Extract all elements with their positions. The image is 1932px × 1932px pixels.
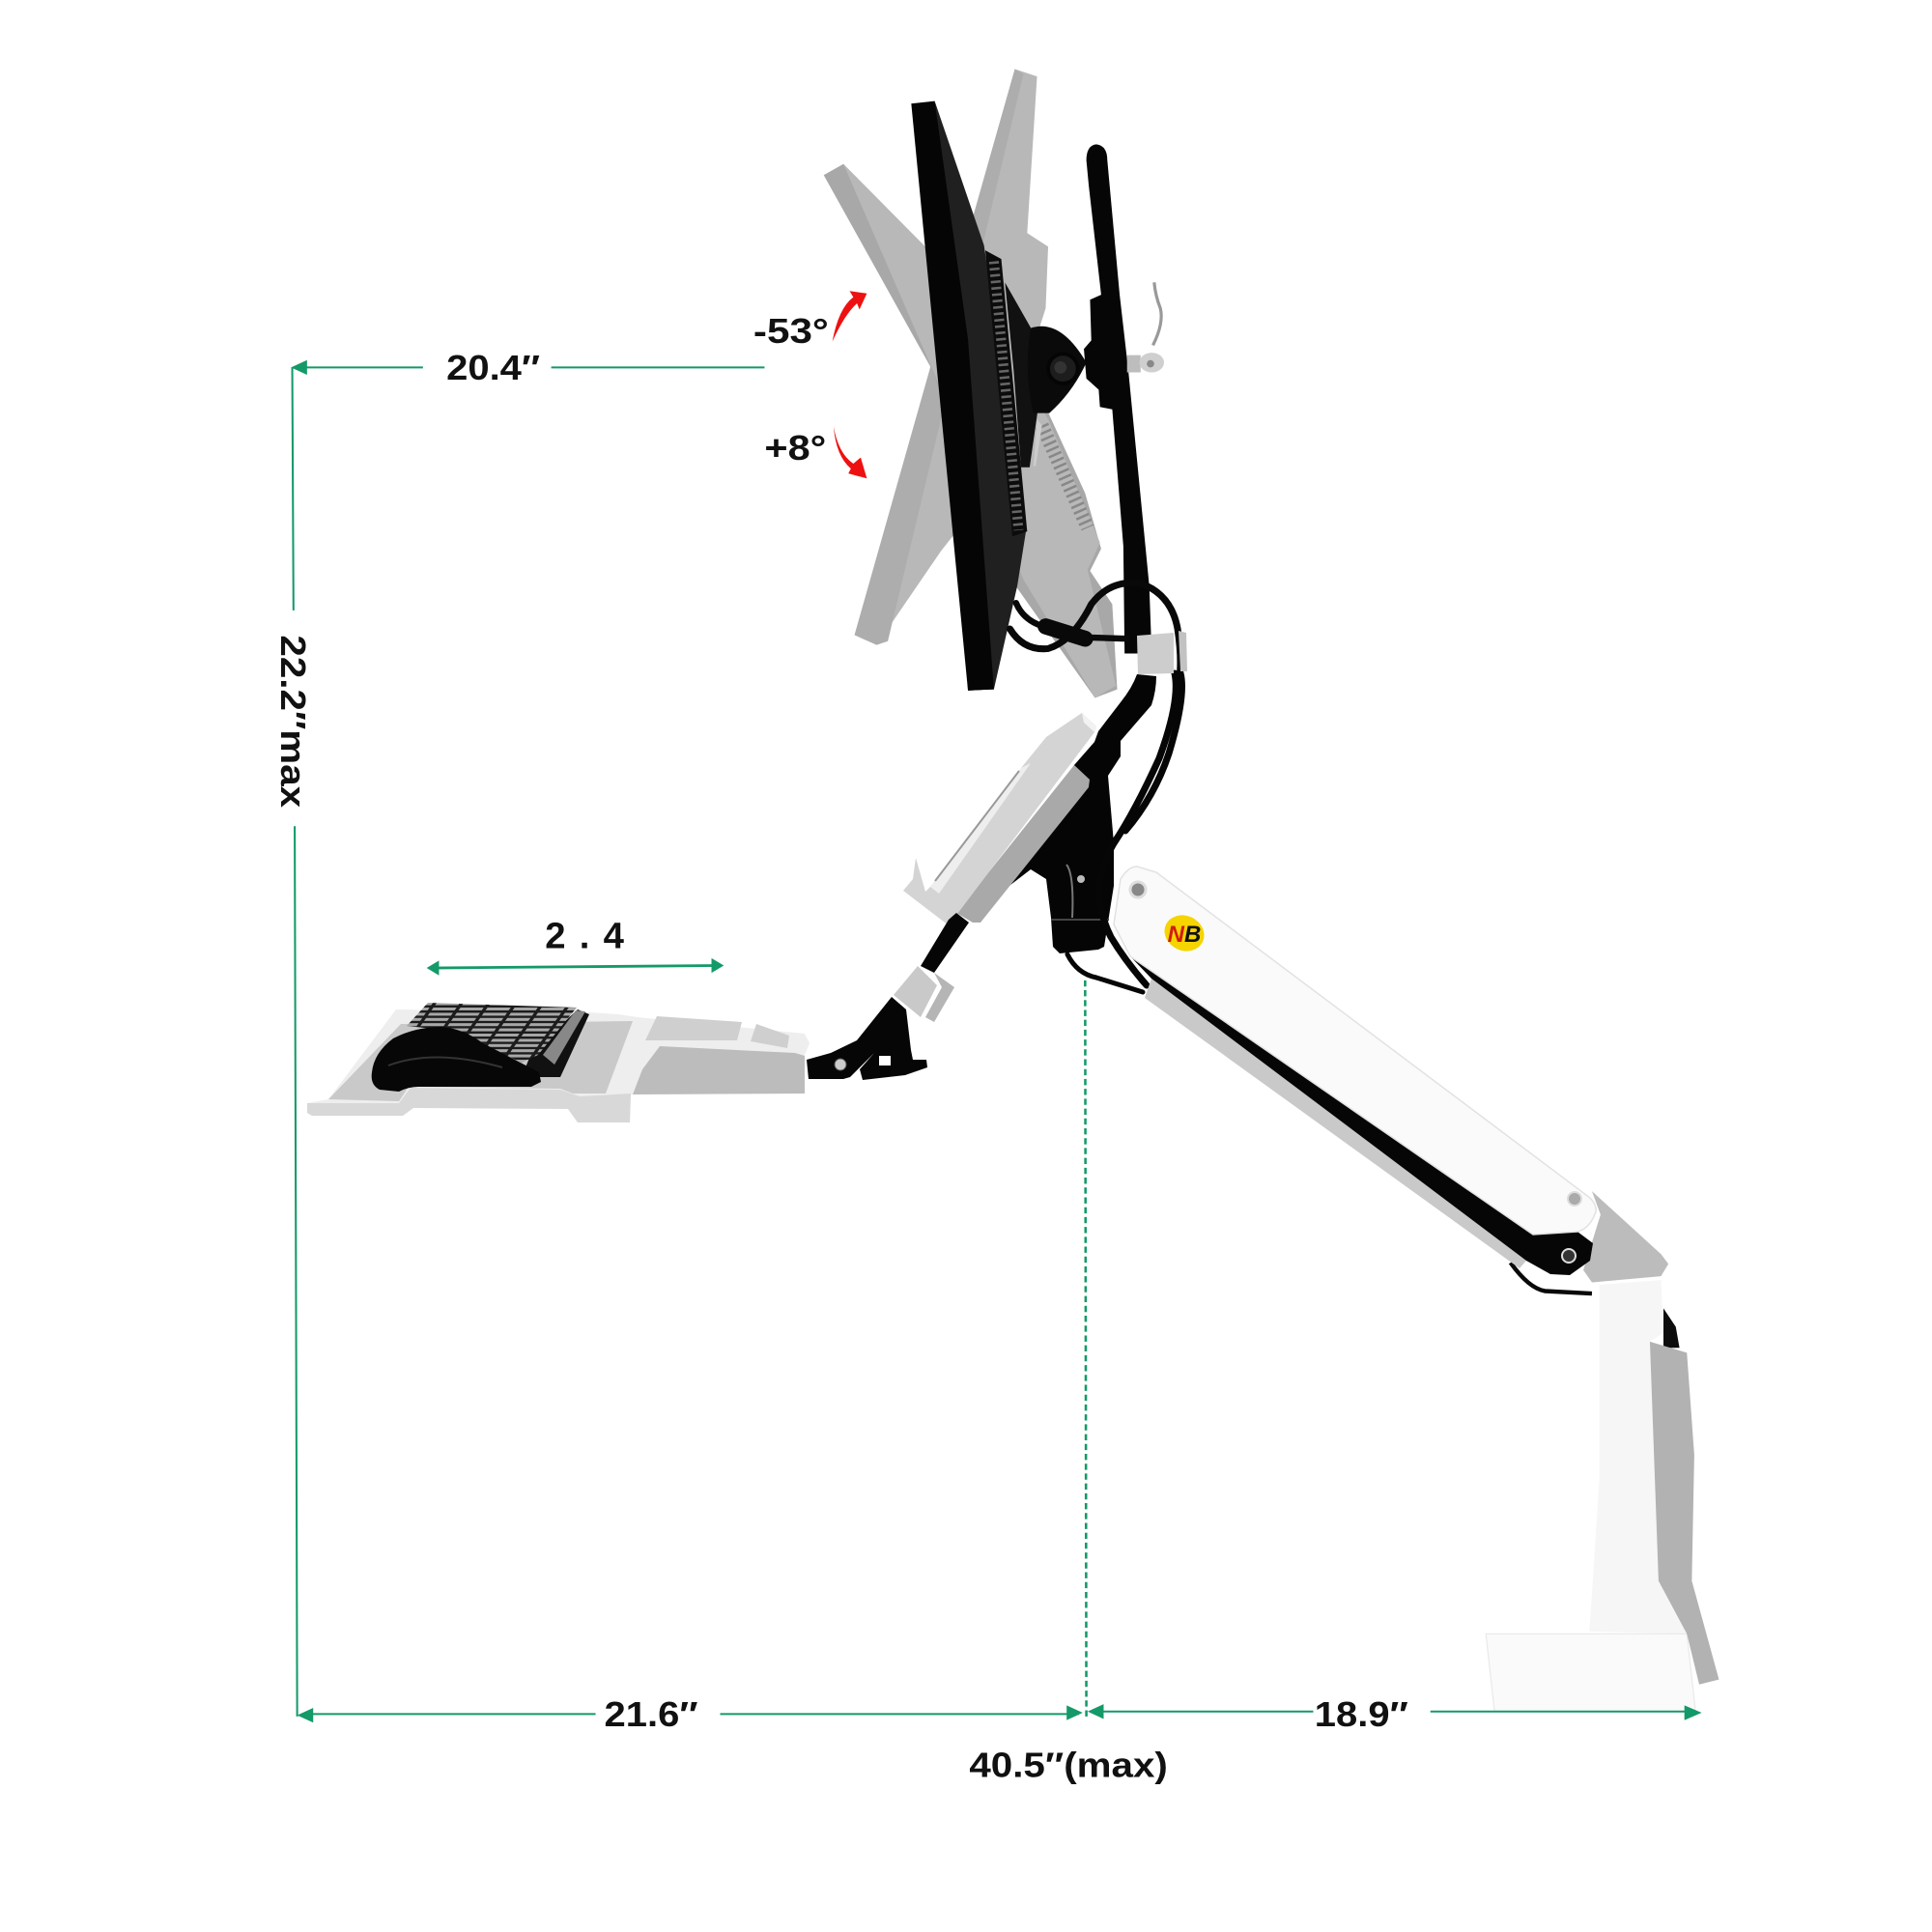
- key and chain: [1127, 282, 1164, 373]
- main arm: [1114, 867, 1596, 1275]
- dashed drop line: [1085, 980, 1087, 1719]
- mouse: [372, 1027, 541, 1092]
- NB logo badge: [1158, 909, 1210, 957]
- monitor: black side profile: [911, 101, 1027, 691]
- 18.9 inch line: [1092, 1711, 1695, 1713]
- 20.4 inch width line: [296, 366, 764, 368]
- keyboard: [407, 1003, 589, 1077]
- label: 40.5 inch max: 40.5″(max): [969, 1746, 1168, 1784]
- cable clip: [1137, 631, 1187, 674]
- dimension labels: [273, 312, 1408, 1784]
- keyboard arm strut: [807, 913, 969, 1080]
- 21.6 inch line: [302, 1713, 1079, 1715]
- tray compartments: [645, 1016, 742, 1040]
- NB logo badge: NB: [1168, 922, 1201, 948]
- tilt joint with VESA bracket: [1005, 282, 1087, 468]
- arm base elbow: [1583, 1191, 1668, 1283]
- ghost monitor: tilted up position: [855, 69, 1048, 645]
- tray surface: [328, 1021, 633, 1101]
- tray front lip: [307, 1088, 631, 1122]
- tray compartment side: [633, 1046, 805, 1094]
- keyboard travel line: [432, 965, 718, 968]
- ghost monitor: tilted down position: [824, 164, 1118, 697]
- strut clip: [894, 966, 954, 1022]
- label: 18.9 inch: 18.9″: [1315, 1695, 1408, 1734]
- label: 21.6 inch: 21.6″: [604, 1695, 697, 1734]
- clamp rear cable and post: [1486, 1191, 1719, 1712]
- monitor rear vent: [985, 250, 1027, 536]
- upright mounting plate: [1084, 144, 1151, 654]
- dimension arrowheads: [291, 360, 1702, 1722]
- red tilt arrow down: [834, 427, 867, 478]
- vent ribs on ghost monitor: [1042, 425, 1088, 527]
- label: 20.4 inch: 20.4″: [446, 349, 540, 387]
- tablet holder: [903, 713, 1096, 925]
- label: -53 degrees: -53°: [753, 312, 829, 351]
- monitor cables and loop: [1009, 582, 1180, 672]
- monitor cables running down the riser: [1067, 673, 1182, 992]
- main black riser and pillar: [1002, 674, 1156, 953]
- dimension lines: [293, 367, 1695, 1719]
- clamp back plate: [1650, 1342, 1719, 1685]
- keyboard tray: [307, 1009, 810, 1122]
- label: +8 degrees: +8°: [764, 429, 826, 468]
- label: 2.4: 2 . 4: [545, 916, 625, 957]
- red tilt arrow up: [833, 291, 867, 342]
- label: 22.2 inch max: 22.2″max: [273, 635, 312, 808]
- 22.2 inch height line: [293, 367, 298, 1717]
